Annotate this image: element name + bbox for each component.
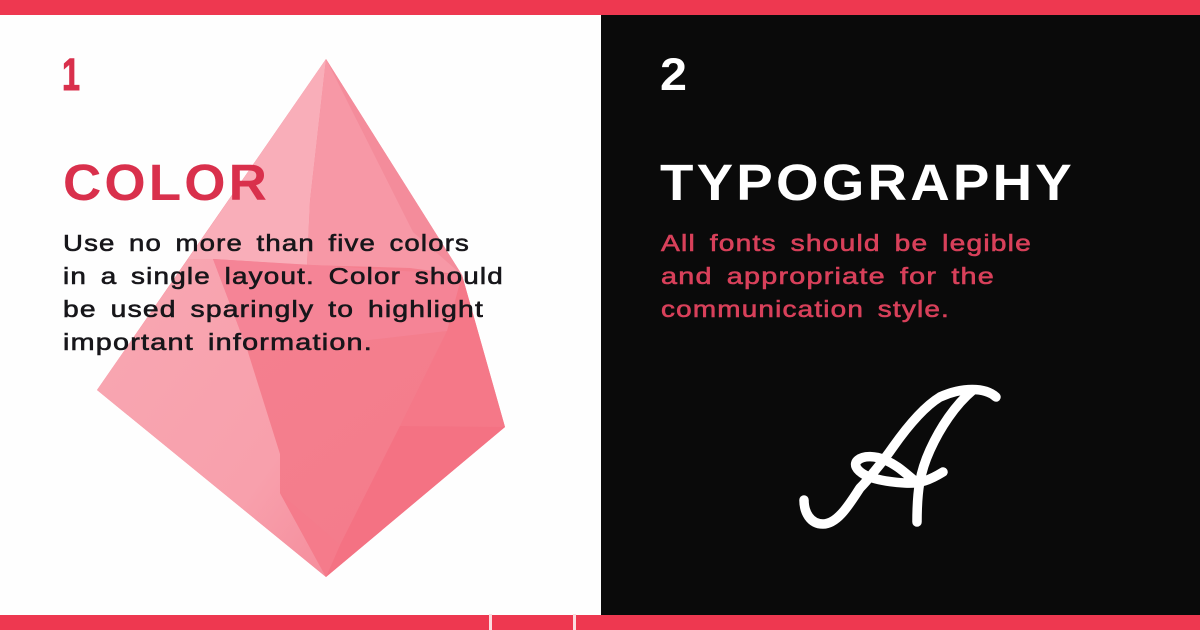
top red band <box>0 0 1200 15</box>
heading: typography: TYPOGRAPHY <box>660 154 1075 211</box>
text block: typography description: and appropriate for the <box>661 263 995 289</box>
panel: typography background <box>601 15 1200 615</box>
number 1: 1 <box>62 49 80 100</box>
icon: pink polygon gem <box>97 59 505 577</box>
icon: script letter A <box>804 390 996 524</box>
text block: color description: be used sparingly to highlight <box>63 296 484 322</box>
text block: typography description: All fonts should be legible <box>661 230 1032 256</box>
number 2: 2 <box>660 49 687 100</box>
bottom red band with tick marks <box>0 614 1200 630</box>
text block: color description: important information. <box>63 329 373 355</box>
text block: typography description: communication style. <box>661 296 950 322</box>
panel: color background <box>0 15 601 615</box>
heading: color: COLOR <box>63 154 270 211</box>
text block: color description: Use no more than five colors <box>63 230 470 256</box>
text block: color description <box>63 230 504 355</box>
text block: color description: in a single layout. Color should <box>63 263 504 289</box>
text block: typography description <box>661 230 1032 322</box>
